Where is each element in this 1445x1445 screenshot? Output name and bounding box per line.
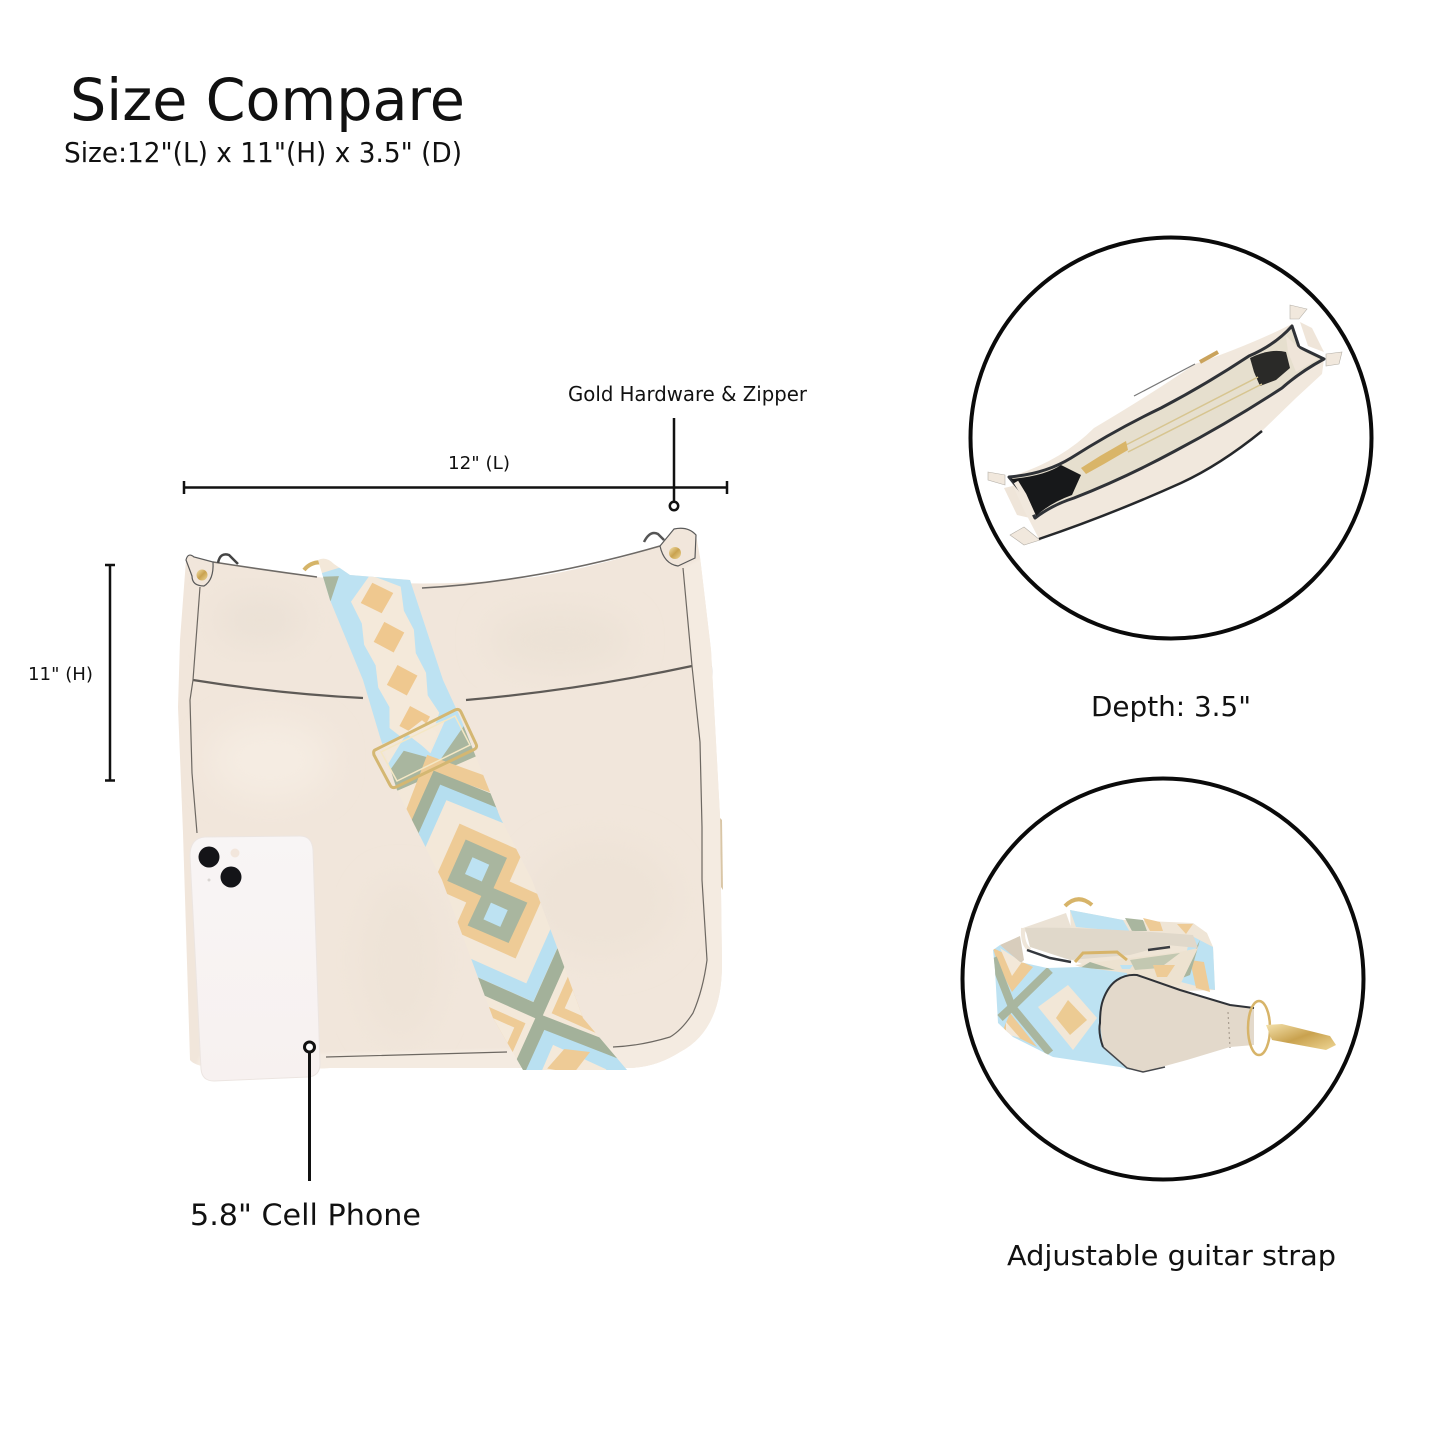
stitching (1228, 1012, 1230, 1048)
camera lenses (198, 846, 220, 868)
chevron: green apex up (412, 770, 498, 836)
back wall top edge and pull (1134, 364, 1195, 396)
buckle (1075, 952, 1127, 962)
callout: cell phone (190, 1042, 421, 1232)
callout: gold hardware and zipper (568, 382, 808, 510)
dimension: length: 12" (L) (448, 453, 510, 474)
left rivet tab (186, 555, 213, 586)
middle strap layer (1075, 948, 1198, 985)
dimension: height (28, 564, 115, 781)
inner lining (1025, 928, 1198, 960)
back cream strip (1023, 913, 1072, 945)
blue centres (465, 857, 490, 882)
dark end pockets (1011, 465, 1081, 516)
double diamond lobes: tan (438, 824, 520, 902)
interior lining (1009, 326, 1324, 518)
outer body (1009, 324, 1324, 539)
dimension: length (183, 453, 728, 494)
leather tab (1100, 975, 1254, 1072)
phone (190, 836, 320, 1081)
end tabs (988, 305, 1342, 545)
dimension: height: 11" (H) (28, 664, 93, 685)
callout: cell phone: 5.8" Cell Phone (190, 1198, 421, 1232)
lower chevrons apex down (471, 929, 558, 1002)
subtitle: overall size: Size:12"(L) x 11"(H) x 3.5" (D) (64, 136, 462, 169)
tan side triangles (489, 1007, 526, 1052)
bag body (178, 528, 735, 1080)
tan diamonds (360, 582, 394, 614)
lower blue and diamond (526, 1030, 627, 1070)
depth caption: Depth: 3.5" (1091, 690, 1251, 723)
lower pattern (382, 708, 627, 1070)
outer-left lining (1000, 936, 1024, 964)
right rivet tab (660, 528, 696, 566)
coiled strap (985, 899, 1336, 1080)
panel: main bag with strap (178, 528, 723, 1082)
stitch lines (190, 568, 707, 1057)
bag top view (988, 305, 1342, 545)
tan under chevron (406, 754, 490, 826)
callout: gold hardware and zipper: Gold Hardware & Zipper (568, 382, 808, 406)
guitar strap (318, 558, 627, 1070)
strap slider buckle (374, 709, 477, 788)
gold ring and clasp (1248, 1001, 1270, 1055)
panel: depth circle (970, 238, 1372, 638)
strap caption: Adjustable guitar strap (1007, 1239, 1336, 1272)
panel: strap circle (962, 778, 1364, 1180)
zipper (1122, 377, 1262, 452)
end gussets (1016, 482, 1033, 515)
upper pattern (322, 568, 459, 744)
front band (993, 945, 1130, 1070)
front wall bottom edge (1039, 431, 1262, 539)
chevron: blue (418, 784, 503, 847)
gold top hook (1065, 899, 1092, 906)
top edge piping (213, 546, 660, 588)
back loop (1070, 910, 1215, 992)
green lobes (447, 840, 507, 896)
gold hook behind strap (304, 562, 326, 570)
inside slider pattern (388, 708, 472, 768)
title: Size Compare (70, 66, 465, 134)
right side strap peek (707, 664, 714, 761)
pocket seam (193, 666, 692, 700)
